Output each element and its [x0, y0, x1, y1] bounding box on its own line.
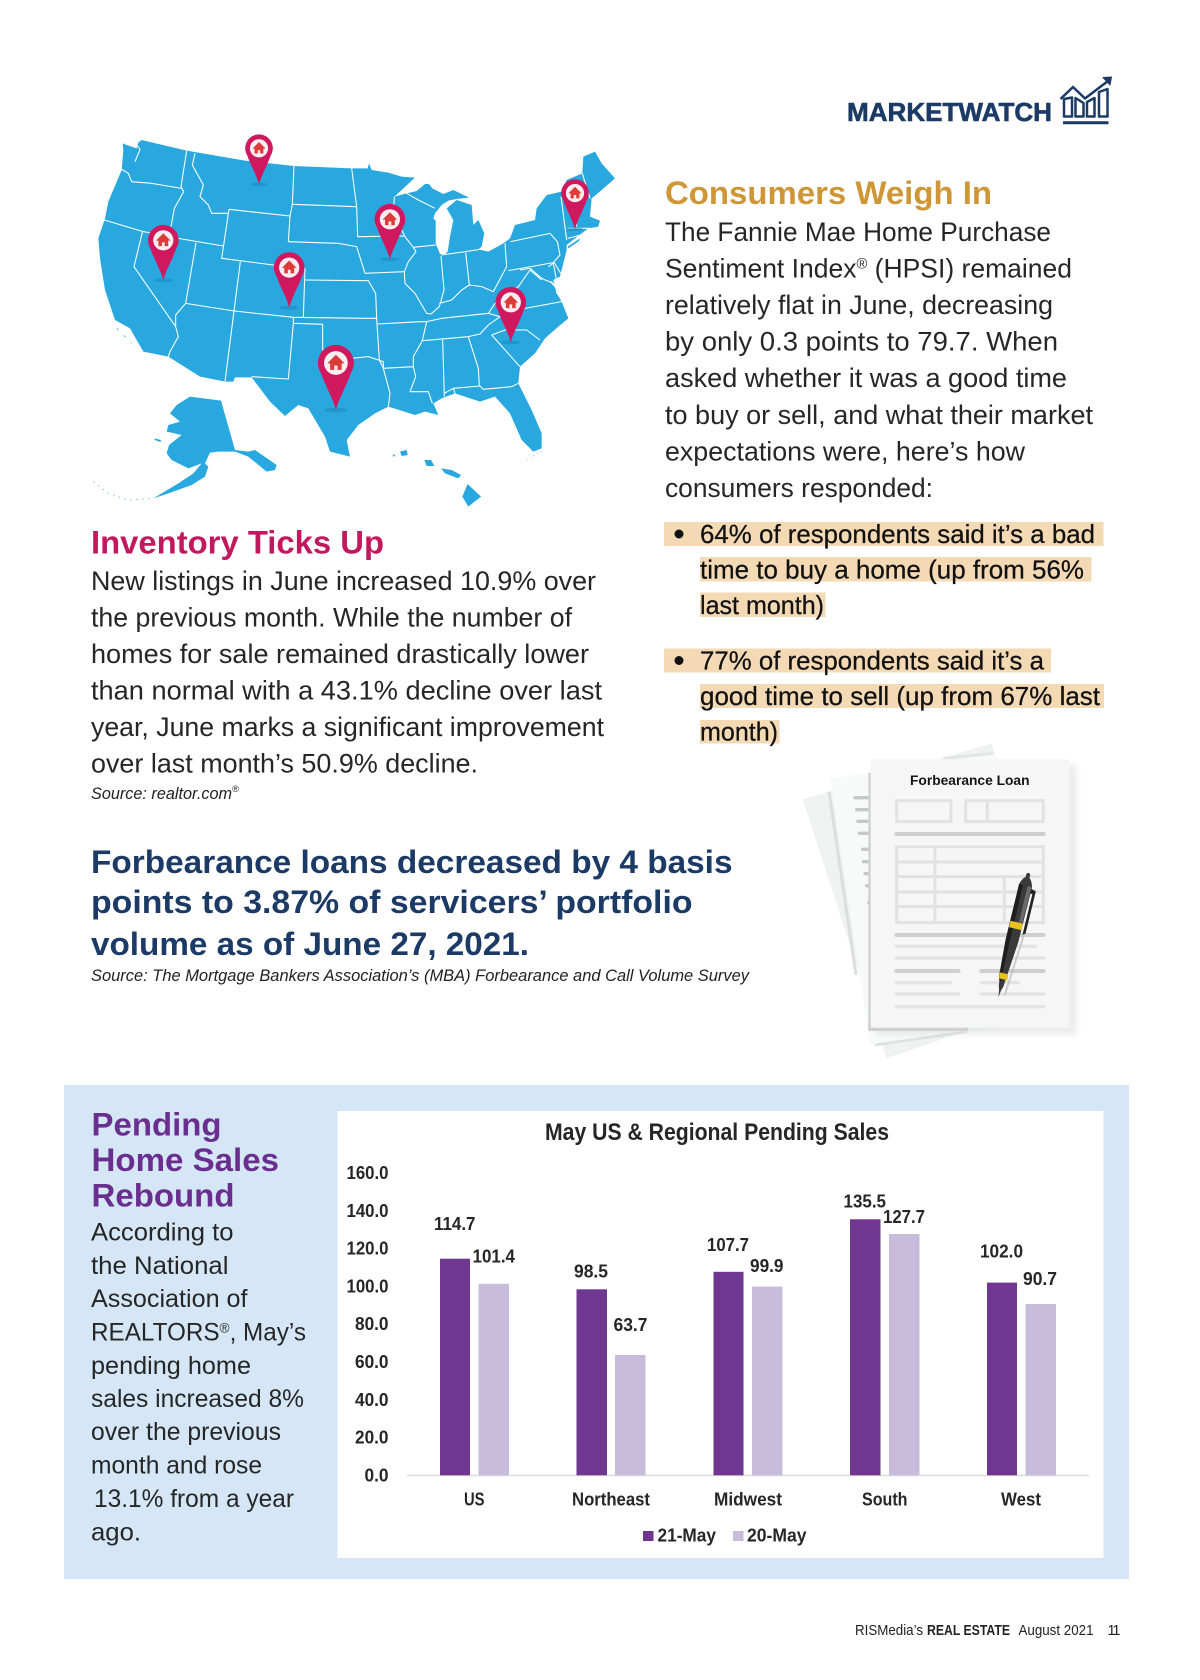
y axis labels: 40.0	[355, 1390, 388, 1410]
legend	[643, 1526, 806, 1546]
legend: 21-May	[658, 1526, 716, 1546]
bullet: 64% bad time to buy: 64% of respondents said it’s a bad	[700, 519, 1095, 549]
section: Consumers Weigh In	[664, 175, 1104, 746]
panel background	[64, 1085, 1129, 1579]
bullet: 64% bad time to buy: last month)	[700, 590, 824, 620]
heading: Inventory Ticks Up: Inventory Ticks Up	[91, 524, 384, 560]
footer: publication credit and page number: 11	[1108, 1623, 1120, 1639]
form lines	[896, 834, 1044, 1007]
Florida keys	[527, 452, 542, 460]
y axis labels: 0.0	[364, 1465, 388, 1485]
footer: publication credit and page number: REAL ESTATE	[927, 1623, 1010, 1639]
value labels: 114.7	[434, 1214, 476, 1234]
text block: pending sales description: ago.	[91, 1518, 141, 1546]
bullet: 77% good time to sell: 77% of respondents said it’s a	[700, 646, 1045, 676]
text block: new listings: than normal with a 43.1% decline over last	[91, 676, 602, 706]
heading: Pending Home Sales Rebound: Rebound	[92, 1178, 234, 1214]
bullet: 64% bad time to buy	[664, 519, 1104, 620]
text block: HPSI description: by only 0.3 points to 79.7. When	[665, 326, 1058, 356]
section: Inventory Ticks Up	[91, 524, 604, 803]
y axis labels: 160.0	[346, 1163, 388, 1183]
footer: publication credit and page number: RISMedia’s	[855, 1623, 923, 1639]
document title: Forbearance Loan	[910, 772, 1030, 788]
back sheet text lines	[855, 798, 871, 902]
bullet: 77% good time to sell	[664, 646, 1104, 746]
soft page shadow	[877, 765, 1077, 1035]
bullet: 64% bad time to buy: time to buy a home (up from 56%	[700, 554, 1084, 584]
Chesapeake Bay	[551, 282, 558, 293]
text block: HPSI description: (HPSI) remained	[867, 254, 1072, 284]
value labels	[434, 1192, 1057, 1335]
text block: HPSI description: relatively flat in June, decreasing	[665, 290, 1053, 320]
text block: new listings: over last month’s 50.9% decline.	[91, 748, 478, 778]
text block: HPSI description: The Fannie Mae Home Purchase	[665, 217, 1051, 247]
pin: Montana	[245, 134, 273, 186]
contiguous US	[98, 140, 615, 457]
front sheet	[868, 773, 875, 1031]
California islands	[117, 328, 132, 343]
y axis labels: 140.0	[346, 1201, 388, 1221]
y axis labels: 100.0	[346, 1276, 388, 1296]
sheet edge shadows	[829, 792, 856, 975]
footer: publication credit and page number: August 2021	[1018, 1623, 1094, 1639]
pin: Vermont	[561, 179, 589, 231]
heading: Forbearance loans statement: volume as of June 27, 2021.	[91, 926, 529, 962]
category labels: Northeast	[572, 1490, 650, 1510]
heading: Forbearance loans statement: Forbearance loans decreased by 4 basis	[91, 844, 732, 880]
text block: pending sales description: month and rose	[91, 1452, 262, 1480]
heading: Pending Home Sales Rebound: Pending	[92, 1106, 222, 1142]
text block: new listings: the previous month. While the number of	[91, 602, 572, 632]
heading: Pending Home Sales Rebound	[92, 1106, 279, 1214]
text block: pending sales description: pending home	[91, 1352, 251, 1380]
panel: Pending Home Sales Rebound	[64, 1085, 1129, 1579]
bars: 20-May	[478, 1234, 1056, 1475]
text block: HPSI description: asked whether it was a good time	[665, 363, 1067, 393]
value labels: 99.9	[750, 1256, 784, 1276]
bullet: 77% good time to sell: good time to sell (up from 67% last	[700, 681, 1101, 711]
value labels: 127.7	[883, 1207, 925, 1227]
value labels: 135.5	[844, 1192, 886, 1212]
text block: pending sales description: 13.1% from a year	[94, 1485, 294, 1513]
text block: pending sales description: ®	[220, 1320, 230, 1336]
back sheet	[803, 743, 1067, 1058]
source: MBA survey: Source: The Mortgage Bankers Association’s (MBA) Forbearance and Call Volume Survey	[91, 966, 750, 985]
y axis labels: 20.0	[355, 1428, 388, 1448]
pin: Nevada	[148, 225, 179, 282]
text block: pending sales description: the National	[91, 1252, 228, 1280]
heading: Forbearance loans statement	[91, 844, 732, 962]
value labels: 98.5	[574, 1262, 608, 1282]
form fields	[897, 801, 1043, 923]
value labels: 107.7	[707, 1235, 749, 1255]
Hawaii	[392, 450, 481, 507]
text block: HPSI description: ®	[856, 256, 867, 272]
value labels: 101.4	[472, 1246, 515, 1266]
heading: Forbearance loans statement: points to 3.87% of servicers’ portfolio	[91, 884, 692, 920]
Long Island	[568, 238, 580, 248]
y axis labels	[346, 1163, 388, 1485]
pin: Iowa	[375, 204, 405, 261]
source: realtor.com: Source: realtor.com	[91, 784, 232, 803]
pin: Colorado	[274, 252, 305, 310]
pen	[992, 871, 1040, 1000]
map: United States with pins	[93, 134, 615, 507]
bars: 21-May	[440, 1219, 1017, 1475]
legend: 20-May	[747, 1526, 806, 1546]
y axis labels: 120.0	[346, 1239, 388, 1259]
map landmass and state lines	[93, 140, 615, 507]
category labels: Midwest	[714, 1490, 782, 1510]
value labels: 102.0	[980, 1242, 1023, 1262]
pin: Carolina	[496, 287, 526, 344]
text block: HPSI description: expectations were, here’s how	[665, 436, 1025, 466]
middle sheet	[830, 754, 1035, 1045]
text block: pending sales description: sales increased 8%	[91, 1385, 304, 1413]
heading: Pending Home Sales Rebound: Home Sales	[92, 1142, 279, 1178]
heading: Consumers Weigh In: Consumers Weigh In	[665, 175, 992, 211]
bar chart: May US and regional pending sales	[338, 1111, 1104, 1558]
Aleutian islands	[93, 482, 153, 500]
text block: HPSI description: Sentiment Index	[665, 254, 860, 284]
text block: pending sales description: , May’s	[230, 1318, 306, 1346]
Alaska	[153, 397, 277, 498]
icon: rising bar chart with arrow	[1060, 77, 1112, 123]
text block: pending sales description	[91, 1218, 306, 1546]
category labels: West	[1001, 1490, 1041, 1510]
illustration: forbearance loan document with pen	[803, 743, 1077, 1058]
text block: pending sales description: Association of	[91, 1285, 248, 1313]
heading: MARKETWATCH: MARKETWATCH	[847, 97, 1052, 127]
text block: HPSI description: consumers responded:	[665, 473, 933, 503]
category labels	[464, 1490, 1041, 1510]
text block: new listings	[91, 566, 604, 778]
pin: Texas	[318, 345, 354, 412]
chart title: May US & Regional Pending Sales	[545, 1119, 889, 1146]
y axis labels: 80.0	[355, 1314, 388, 1334]
axis line	[406, 1474, 1089, 1476]
text block: HPSI description	[665, 217, 1093, 503]
text block: pending sales description: over the previous	[91, 1418, 281, 1446]
category labels: South	[862, 1490, 908, 1510]
text block: HPSI description: to buy or sell, and what their market	[665, 400, 1093, 430]
y axis labels: 60.0	[355, 1352, 388, 1372]
text block: new listings: homes for sale remained drastically lower	[91, 639, 589, 669]
value labels: 90.7	[1023, 1269, 1057, 1289]
header: Marketwatch	[847, 77, 1112, 127]
section: Forbearance loans	[91, 844, 750, 985]
bullet: 77% good time to sell: month)	[700, 716, 778, 746]
text block: pending sales description: According to	[91, 1218, 234, 1246]
footer: publication credit and page number	[855, 1623, 1120, 1639]
text block: new listings: New listings in June increased 10.9% over	[91, 566, 596, 596]
category labels: US	[464, 1490, 484, 1510]
text block: new listings: year, June marks a significant improvement	[91, 712, 604, 742]
text block: pending sales description: REALTORS	[91, 1318, 223, 1346]
value labels: 63.7	[614, 1315, 648, 1335]
source: realtor.com: ®	[232, 784, 239, 794]
state boundaries	[104, 145, 590, 407]
